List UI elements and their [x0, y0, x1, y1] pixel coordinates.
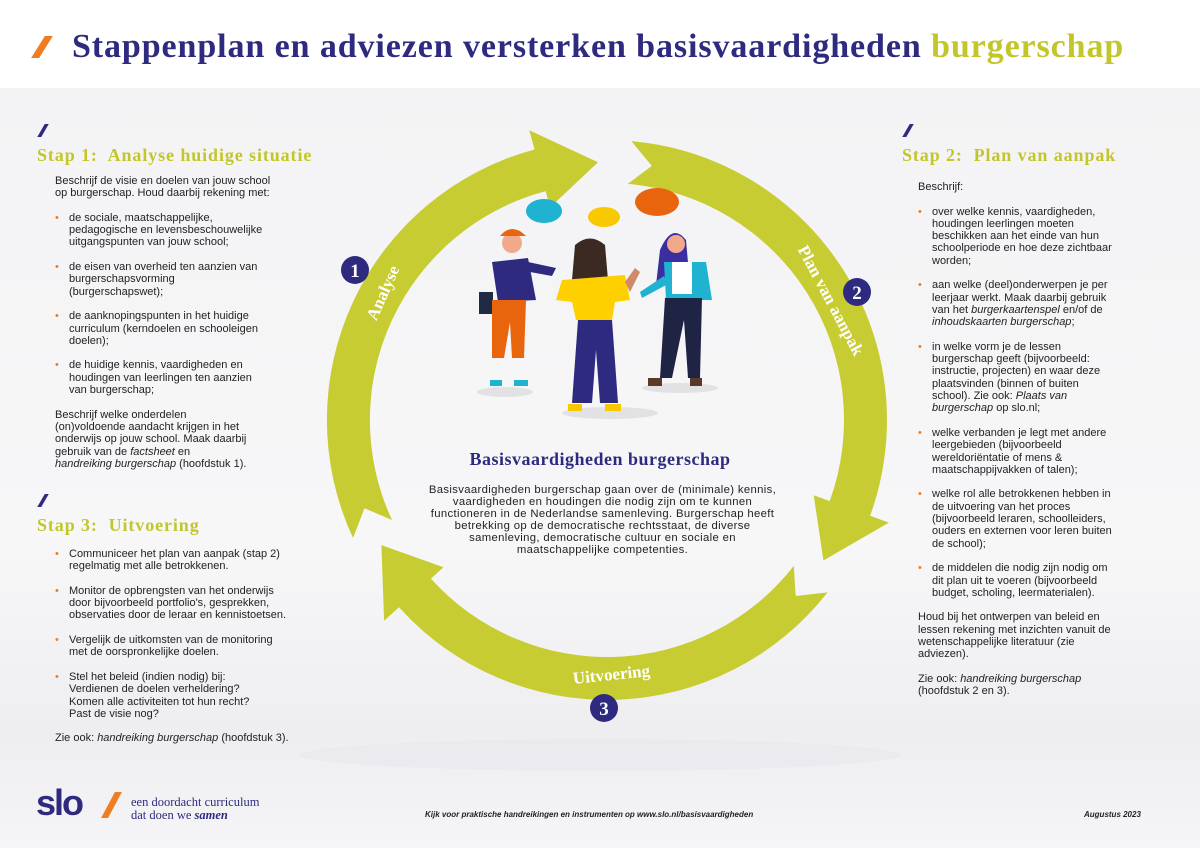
text block: stap 3: Verdienen de doelen verheldering?: [69, 683, 240, 695]
text block: stap 2: lessen rekening met inzichten vanuit de: [918, 624, 1111, 636]
text block: stap 3: Monitor de opbrengsten van het onderwijs: [69, 585, 274, 597]
text block: stap 1: de eisen van overheid ten aanzien van: [69, 261, 257, 273]
text block: stap 3: regelmatig met alle betrokkenen.: [69, 560, 229, 572]
text block: stap 1: burgerschapsvorming: [69, 273, 175, 285]
text block: stap 2: (hoofdstuk 2 en 3).: [918, 685, 1010, 697]
text block: intro: maatschappelijke competenties.: [517, 544, 688, 556]
logo: slo: dat doen we samen: [131, 808, 228, 822]
panel: stap 3: [37, 494, 289, 744]
text block: stap 1: pedagogische en levensbeschouwelijke: [69, 224, 262, 236]
heading: basisvaardigheden burgerschap: Basisvaardigheden burgerschap: [469, 449, 731, 469]
text block: stap 1: houdingen van leerlingen ten aanzien: [69, 372, 252, 384]
icon: number 3: [590, 694, 618, 722]
text block: stap 2: worden;: [932, 255, 971, 267]
text block: stap 1: curriculum (kerndoelen en schooleigen: [69, 323, 258, 335]
text block: stap 3: [55, 548, 289, 744]
text block: stap 2: over welke kennis, vaardigheden,: [932, 206, 1095, 218]
text block: stap 1: van burgerschap;: [69, 384, 154, 396]
text block: stap 3: Communiceer het plan van aanpak (stap 2): [69, 548, 280, 560]
text block: stap 2: dit plan uit te voeren (bijvoorbeeld: [932, 574, 1097, 586]
text block: stap 2: (bijvoorbeeld leraren, schoolleiders,: [932, 513, 1106, 525]
text block: stap 1: handreiking burgerschap (hoofdstuk 1).: [55, 458, 246, 470]
text block: stap 2: Houd bij het ontwerpen van beleid en: [918, 611, 1100, 623]
text block: stap 1: gebruik van de factsheet en: [55, 446, 190, 458]
text block: stap 2: schoolperiode en hoe deze zichtbaar: [932, 242, 1112, 254]
text block: stap 1: doelen);: [69, 335, 109, 347]
text block: stap 2: van het burgerkaartenspel en/of de: [932, 304, 1103, 316]
text block: stap 2: aan welke (deel)onderwerpen je per: [932, 279, 1108, 291]
text block: stap 2: plaatsvinden (binnen of buiten: [932, 378, 1079, 390]
text block: stap 2: budget, scholing, leermaterialen).: [932, 587, 1095, 599]
text block: stap 3: Past de visie nog?: [69, 708, 159, 720]
text block: intro: functioneren in de Nederlandse samenleving. Burgerschap heeft: [431, 508, 774, 520]
text block: stap 1: (on)voldoende aandacht krijgen in het: [55, 421, 239, 433]
text block: stap 1: [55, 175, 270, 470]
arrow: plan van aanpak: Plan van aanpak: [794, 242, 868, 359]
text block: stap 2: beschikken aan het einde van hun: [932, 230, 1099, 242]
text block: intro: betrekking op de democratische rechtsstaat, de diverse: [455, 520, 750, 532]
text block: stap 2: instructie, projecten) en waar deze: [932, 365, 1100, 377]
text block: stap 1: Beschrijf welke onderdelen: [55, 409, 186, 421]
text block: stap 3: met de oorspronkelijke doelen.: [69, 646, 219, 658]
arrow: uitvoering: [381, 545, 828, 700]
heading: stap 3: Stap 3: Uitvoering: [37, 515, 200, 535]
text block: stap 1: onderwijs op jouw school. Maak daarbij: [55, 433, 246, 445]
text block: stap 2: de uitvoering van het proces: [932, 501, 1070, 513]
text block: stap 2: in welke vorm je de lessen: [932, 341, 1061, 353]
text block: stap 1: de huidige kennis, vaardigheden en: [69, 359, 243, 371]
text block: stap 3: Komen alle activiteiten tot hun recht?: [69, 696, 249, 708]
icon: number 2: 2: [852, 283, 862, 304]
text block: stap 2: ouders en externen voor leren buiten: [932, 525, 1112, 537]
text block: stap 2: Beschrijf:: [918, 181, 963, 193]
text block: intro: samenleving, democratische cultuur en sociale en: [469, 532, 736, 544]
text block: stap 2: de school);: [932, 538, 986, 550]
text block: stap 2: welke rol alle betrokkenen hebben in: [932, 488, 1111, 500]
text block: stap 3: Zie ook: handreiking burgerschap (hoofdstuk 3).: [55, 732, 289, 744]
text block: stap 2: houdingen leerlingen moeten: [932, 218, 1074, 230]
text block: stap 1: de aanknopingspunten in het huidige: [69, 310, 249, 322]
text block: stap 2: leerjaar werkt. Maak daarbij gebruik: [932, 292, 1106, 304]
text block: stap 2: inhoudskaarten burgerschap;: [932, 316, 1074, 328]
text block: stap 2: school). Zie ook: Plaats van: [932, 390, 1067, 402]
text block: stap 2: burgerschap op slo.nl;: [932, 402, 1040, 414]
text block: stap 1: Beschrijf de visie en doelen van jouw school: [55, 175, 270, 187]
footer text: Kijk voor praktische handreikingen en instrumenten op www.slo.nl/basisvaardigheden: [425, 810, 753, 819]
text block: intro: [429, 484, 776, 556]
logo: slo: een doordacht curriculum: [131, 795, 259, 809]
text block: stap 3: Stel het beleid (indien nodig) bij:: [69, 671, 226, 683]
icon: number 2: [843, 278, 871, 306]
arrow: plan van aanpak: [628, 141, 889, 560]
text block: stap 1: uitgangspunten van jouw school;: [69, 236, 229, 248]
text block: stap 2: welke verbanden je legt met andere: [932, 427, 1106, 439]
text block: stap 1: de sociale, maatschappelijke,: [69, 212, 213, 224]
arrow: uitvoering: Uitvoering: [572, 661, 651, 688]
text block: intro: vaardigheden en houdingen die nodig zijn om te kunnen: [453, 496, 752, 508]
panel: stap 1: [37, 124, 312, 470]
title: Stappenplan en adviezen versterken basisvaardigheden burgerschap: [72, 28, 1124, 65]
text block: stap 2: Zie ook: handreiking burgerschap: [918, 673, 1081, 685]
footer date: Augustus 2023: [1084, 810, 1141, 819]
text block: stap 3: door bijvoorbeeld portfolio's, gesprekken,: [69, 597, 269, 609]
text block: stap 3: Vergelijk de uitkomsten van de monitoring: [69, 634, 273, 646]
logo: slo: [36, 782, 260, 823]
arrow: analyse: Analyse: [363, 262, 404, 323]
heading: stap 2: Stap 2: Plan van aanpak: [902, 145, 1116, 165]
heading: stap 1: Stap 1: Analyse huidige situatie: [37, 145, 312, 165]
text block: stap 3: observaties door de leraar en kennistoetsen.: [69, 609, 286, 621]
text block: intro: Basisvaardigheden burgerschap gaan over de (minimale) kennis,: [429, 484, 776, 496]
logo: slo: slo: [36, 782, 82, 823]
icon: number 1: 1: [350, 261, 360, 282]
illustration: people talking: [477, 188, 718, 419]
text block: stap 2: wetenschappelijke literatuur (zie: [918, 636, 1075, 648]
icon: number 3: 3: [599, 699, 609, 720]
text block: stap 1: op burgerschap. Houd daarbij rekening met:: [55, 187, 270, 199]
text block: stap 2: wereldoriëntatie of mens &: [932, 452, 1062, 464]
text block: stap 2: maatschappijvakken of talen);: [932, 464, 1078, 476]
text block: stap 2: de middelen die nodig zijn nodig om: [932, 562, 1108, 574]
text block: stap 1: (burgerschapswet);: [69, 286, 163, 298]
arrow: analyse: [327, 130, 598, 538]
icon: number 1: [341, 256, 369, 284]
text block: stap 2: leergebieden (bijvoorbeeld: [932, 439, 1062, 451]
text block: stap 2: [918, 181, 1112, 697]
text block: stap 2: adviezen).: [918, 648, 969, 660]
text block: stap 2: burgerschap geeft (bijvoorbeeld:: [932, 353, 1090, 365]
panel: stap 2: [902, 124, 1116, 697]
